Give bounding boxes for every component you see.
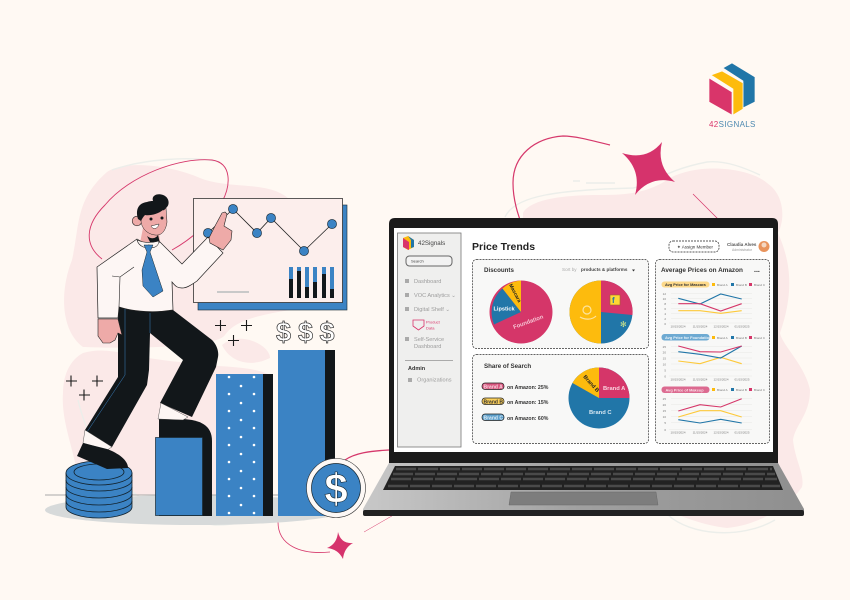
chart: mascara: 2: [664, 317, 666, 321]
chart: makeup: 12/15/2024: [713, 430, 729, 434]
panel: average prices: ...: [754, 267, 760, 274]
chart: foundation: 10: [663, 362, 666, 366]
hair: [137, 194, 169, 221]
icon: dollar coin: [306, 458, 366, 518]
screen: [394, 228, 773, 452]
sidebar menu: Dashboard: [414, 344, 441, 350]
collar: [137, 240, 159, 248]
user profile: [727, 241, 770, 252]
chart: foundation: 20: [663, 350, 666, 354]
icon: dollar signs: [276, 317, 335, 347]
legend brand A: [482, 383, 549, 391]
trackpad: [509, 492, 658, 505]
panel: average prices: [656, 260, 770, 444]
chart: foundation: 15: [663, 356, 666, 360]
chart: makeup: Brand A: [717, 388, 728, 392]
product data item: Product: [426, 320, 441, 324]
chart: makeup: Brand B: [736, 388, 747, 392]
sidebar menu: Digital Shelf ⌄: [414, 307, 450, 313]
dashboard sidebar: [398, 233, 461, 447]
panel: discounts: products & platforms: [581, 267, 628, 272]
icon: plus signs right: [215, 320, 252, 346]
chart board: [194, 198, 347, 310]
chart: makeup: 10: [663, 415, 666, 419]
panel: average prices: Average Prices on Amazon: [661, 267, 743, 274]
search box: Search: [411, 258, 424, 264]
chart: mascara: Brand B: [736, 283, 747, 287]
user profile: Administrator: [732, 248, 753, 252]
socks: [83, 403, 188, 450]
admin heading: Admin: [408, 366, 426, 372]
chart: foundation: 12/15/2024: [713, 378, 729, 382]
chart: makeup: 0: [664, 428, 666, 432]
logo: 42Signals: [709, 63, 756, 129]
panel: share of search: Share of Search: [484, 363, 531, 370]
neck and head: [132, 194, 169, 243]
icon: dollar signs: $: [319, 317, 335, 347]
icon: coin stack: [66, 461, 132, 518]
bar: tall: [278, 350, 335, 516]
tie: [142, 245, 163, 297]
chart: foundation: Brand A: [717, 336, 728, 340]
legend brand B: on Amazon: 15%: [507, 400, 549, 406]
chart: makeup: 01/15/2025: [734, 430, 750, 434]
hand pointing: [209, 212, 232, 250]
chart: foundation: 10/15/2024: [670, 378, 686, 382]
ground line: [45, 494, 340, 496]
pants: [85, 305, 218, 447]
product data item: Data: [426, 326, 435, 330]
chart: makeup: 5: [664, 421, 666, 425]
chart: makeup: Avg Price of Makeup: [666, 387, 704, 392]
logo: 42Signals: 42SIGNALS: [709, 120, 756, 129]
background swirl lines: [78, 159, 775, 533]
chart: makeup: 25: [663, 397, 666, 401]
icon: dollar signs: $: [276, 317, 291, 347]
panel: discounts: Discounts: [484, 267, 514, 274]
chart: mascara: Avg Price for Mascara: [665, 282, 707, 287]
front edge: [363, 510, 804, 516]
chart: makeup: Brand C: [754, 388, 766, 392]
legend brand B: Brand B: [484, 399, 503, 405]
icon: flipkart: f: [612, 296, 615, 305]
pie: categories: [490, 280, 552, 344]
product data item: [413, 320, 441, 330]
chart: foundation: [662, 334, 766, 382]
chart: mascara: 12/15/2024: [713, 324, 729, 328]
chart: mascara: 4: [664, 312, 666, 316]
chart: mascara: [662, 282, 766, 328]
icon: dollar signs: $: [298, 317, 313, 347]
laptop: [363, 218, 804, 516]
chart: foundation: 5: [664, 368, 666, 372]
sidebar menu: Organizations: [417, 378, 452, 384]
chart: mascara: Brand A: [717, 283, 728, 287]
ground shadow: [45, 495, 345, 525]
chart: makeup: 15: [663, 409, 666, 413]
legend brand A: Brand A: [484, 384, 503, 390]
chart: makeup: 10/15/2024: [670, 430, 686, 434]
chart: foundation: Avg Price for Foundation: [665, 335, 712, 340]
pie: categories: Mascara: [507, 283, 522, 304]
pie: platforms: [570, 280, 633, 344]
panel: discounts: [472, 260, 648, 348]
dashboard title: Price Trends: [472, 241, 535, 253]
sidebar menu: Dashboard: [414, 279, 441, 285]
chart: foundation: Brand B: [736, 336, 747, 340]
legend brand A: on Amazon: 25%: [507, 385, 549, 391]
chart: mascara: 10/15/2024: [670, 324, 686, 328]
shirt: [97, 237, 223, 318]
bar: short: [156, 419, 212, 516]
chart: mascara: 01/15/2025: [734, 324, 750, 328]
chart: mascara: 0: [664, 322, 666, 326]
bezel: [389, 218, 778, 463]
keyboard: [383, 466, 783, 490]
icon: amazon: [580, 306, 596, 319]
icon: plus signs left: [66, 376, 103, 400]
pie: brand share: Brand B: [582, 374, 600, 394]
line chart on board: [203, 204, 337, 256]
background blobs: [63, 165, 810, 528]
sidebar logo: 42Signals: [418, 240, 445, 247]
character: person pointing: [77, 194, 232, 469]
left hand: [98, 319, 122, 343]
sidebar menu: [414, 279, 456, 384]
chart: makeup: 11/15/2024: [693, 430, 708, 434]
legend brand C: on Amazon: 60%: [507, 416, 549, 422]
chart: mascara: 8: [664, 302, 666, 306]
user profile: Claudia Alves: [727, 242, 757, 247]
chart: mascara: 10: [663, 297, 666, 301]
pie: brand share: [568, 368, 630, 428]
pie: categories: Lipstick: [494, 306, 516, 312]
search box: [406, 256, 452, 266]
panel: discounts: Sort by: [562, 267, 577, 272]
legend brand B: [482, 398, 549, 406]
legend brand C: Brand C: [484, 415, 503, 421]
pie: categories: Foundation: [513, 314, 545, 331]
pie: brand share: Brand C: [589, 410, 612, 416]
decorative red curves: [89, 136, 727, 553]
chart: foundation: 25: [663, 345, 666, 349]
icon: dollar coin: $: [324, 465, 348, 512]
chart: makeup: 20: [663, 403, 666, 407]
chart: mascara: 12: [663, 292, 666, 296]
chart: mascara: 6: [664, 307, 666, 311]
chart: foundation: 01/15/2025: [734, 378, 750, 382]
assign member button: ✦ Assign Member: [677, 244, 714, 250]
assign member button: [669, 241, 719, 252]
icon: walmart: ✻: [620, 320, 627, 329]
mini bars on board: [289, 267, 334, 298]
icon: small red sparkle: [327, 532, 353, 559]
sidebar menu: Self-Service: [414, 337, 444, 343]
chart: foundation: 0: [664, 374, 666, 378]
chart: mascara: 11/15/2024: [693, 324, 708, 328]
chart: foundation: Brand C: [754, 336, 766, 340]
sidebar logo: [403, 236, 445, 250]
shoe: [77, 443, 128, 469]
pie: brand share: Brand A: [603, 386, 626, 392]
sidebar menu: VOC Analytics ⌄: [414, 293, 456, 299]
panel: share of search: [472, 354, 648, 444]
chart: makeup: [662, 386, 766, 434]
icon: large red sparkle: [622, 142, 675, 195]
chart: foundation: 11/15/2024: [693, 378, 708, 382]
bar: dotted middle: [216, 374, 273, 516]
legend brand C: [482, 414, 549, 422]
chart: mascara: Brand C: [754, 283, 766, 287]
